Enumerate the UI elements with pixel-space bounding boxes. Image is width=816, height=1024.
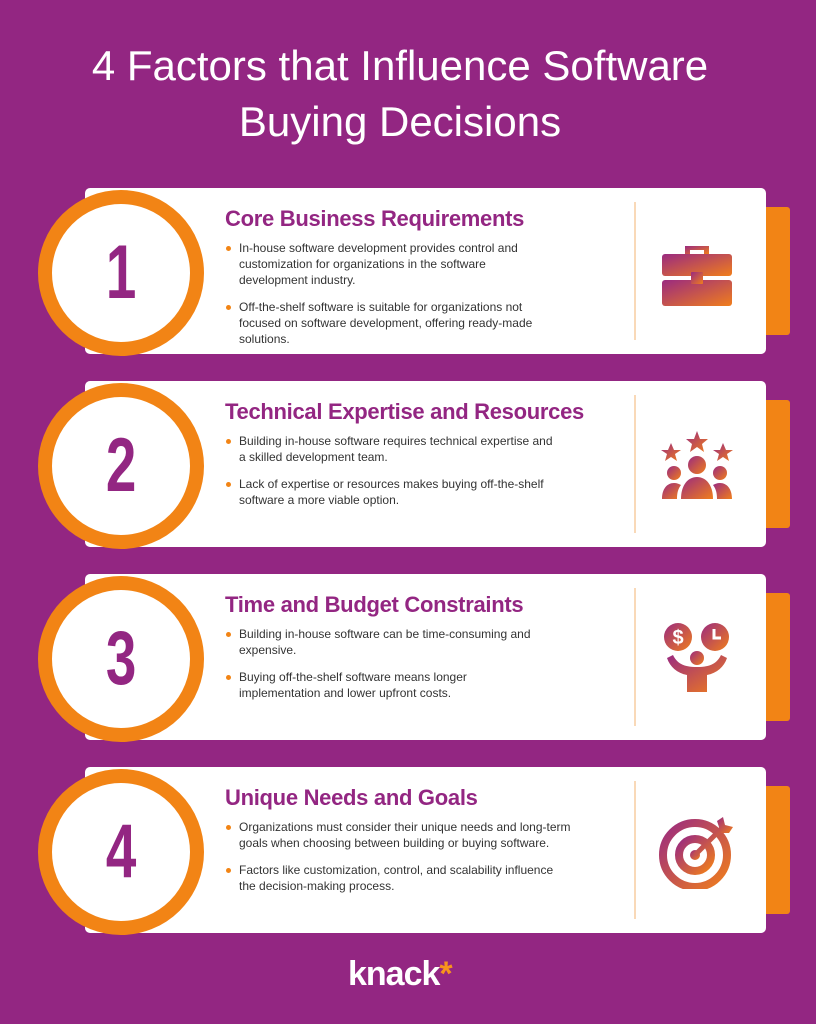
heading: Technical Expertise and Resources	[225, 399, 584, 424]
panel: core business requirements	[85, 188, 766, 354]
logo: knack*	[348, 955, 452, 993]
bullets: focused on software development, offering ready-made	[239, 316, 532, 330]
bullets: expensive.	[239, 643, 296, 657]
tab 1	[760, 207, 790, 335]
icon: money and time	[664, 623, 729, 692]
number circle 1: 1	[106, 230, 136, 315]
number circle 2	[38, 383, 204, 549]
number circle 3: 3	[106, 616, 136, 701]
icon: briefcase	[662, 246, 732, 306]
number circle 4: 4	[106, 809, 136, 894]
bullets: the decision-making process.	[239, 879, 394, 893]
bullets: a skilled development team.	[239, 450, 388, 464]
bullets: solutions.	[239, 332, 290, 346]
bullets: Building in-house software can be time-consuming and	[239, 627, 530, 641]
bullets: Buying off-the-shelf software means longer	[239, 670, 467, 684]
icon: team with stars	[661, 431, 733, 499]
bullets	[226, 820, 571, 893]
number circle 2: 2	[106, 423, 136, 508]
bullets: Lack of expertise or resources makes buying off-the-shelf	[239, 477, 544, 491]
bullets: In-house software development provides control and	[239, 241, 518, 255]
bullets: Organizations must consider their unique needs and long-term	[239, 820, 571, 834]
bullets: Factors like customization, control, and scalability influence	[239, 863, 553, 877]
panel: technical expertise	[85, 381, 766, 547]
heading: Time and Budget Constraints	[225, 592, 523, 617]
heading: Unique Needs and Goals	[225, 785, 478, 810]
icon: money and time: $	[672, 627, 684, 649]
icon: target	[659, 817, 733, 889]
title	[92, 42, 708, 145]
number circle 4	[38, 769, 204, 935]
panel: unique needs	[85, 767, 766, 933]
bullets: development industry.	[239, 273, 356, 287]
bullets: Building in-house software requires technical expertise and	[239, 434, 553, 448]
tab 3	[760, 593, 790, 721]
heading: Core Business Requirements	[225, 206, 524, 231]
bullets: goals when choosing between building or buying software.	[239, 836, 549, 850]
title: 4 Factors that Influence Software	[92, 42, 708, 89]
panel: time and budget	[85, 574, 766, 740]
tab 4	[760, 786, 790, 914]
bullets	[226, 434, 553, 507]
bullets	[226, 241, 532, 346]
number circle 1	[38, 190, 204, 356]
title: Buying Decisions	[239, 98, 561, 145]
tab 2	[760, 400, 790, 528]
bullets: software a more viable option.	[239, 493, 399, 507]
bullets	[226, 627, 530, 700]
bullets: implementation and lower upfront costs.	[239, 686, 451, 700]
bullets: Off-the-shelf software is suitable for organizations not	[239, 300, 522, 314]
number circle 3	[38, 576, 204, 742]
bullets: customization for organizations in the software	[239, 257, 486, 271]
